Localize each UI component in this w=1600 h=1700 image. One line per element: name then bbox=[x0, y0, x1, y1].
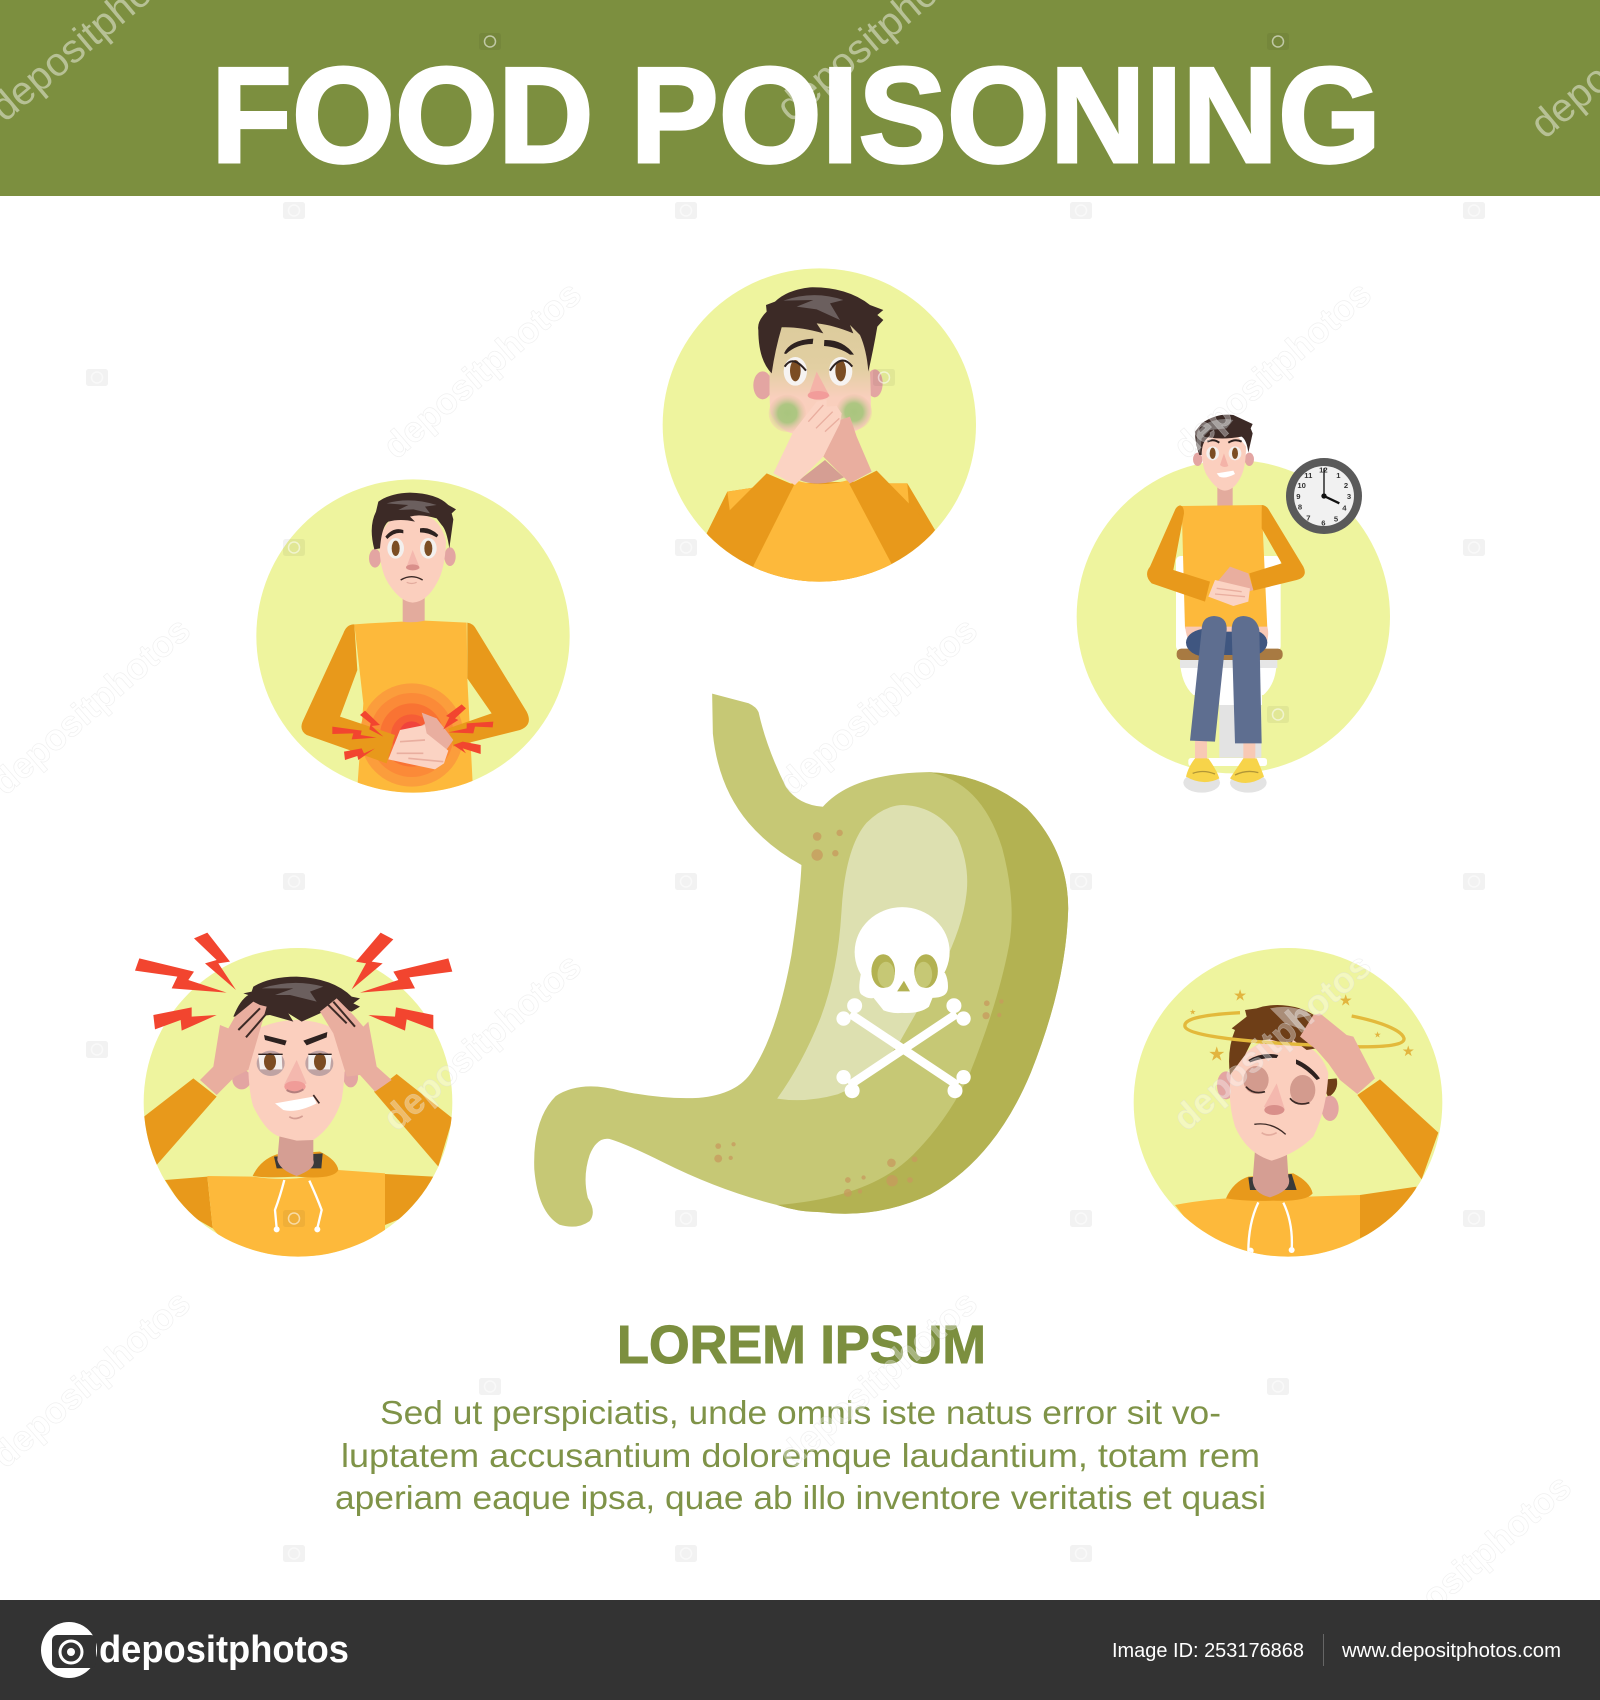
icon: wall clock at four o'clock: 4 bbox=[1342, 503, 1347, 512]
toilet bbox=[1176, 556, 1283, 766]
title: FOOD POISONING bbox=[211, 39, 1381, 191]
icon: wall clock at four o'clock: 8 bbox=[1298, 503, 1303, 512]
person seated bbox=[1147, 415, 1305, 793]
dizzy halo and stars: ★ bbox=[1374, 1030, 1382, 1040]
icon: wall clock at four o'clock: 6 bbox=[1321, 519, 1325, 528]
hood and neck bbox=[1226, 1150, 1313, 1254]
icon: wall clock at four o'clock: 5 bbox=[1334, 514, 1339, 523]
footer bar bbox=[0, 1600, 1600, 1700]
icon: wall clock at four o'clock: 1 bbox=[1336, 471, 1341, 480]
pain rings bbox=[360, 683, 463, 787]
pain bolts bbox=[135, 933, 452, 1031]
watermark: repeated stock-photo marks: depositphotos bbox=[771, 1282, 985, 1475]
icon: wall clock at four o'clock: 3 bbox=[1347, 492, 1351, 501]
image id: Image ID: 253176868 bbox=[1112, 1640, 1304, 1662]
icon: skull and crossbones bbox=[836, 907, 971, 1098]
panel: stomach pain, left circle bbox=[256, 479, 570, 797]
icon: wall clock at four o'clock: 10 bbox=[1297, 481, 1306, 490]
body text block bbox=[335, 1394, 1266, 1516]
icon: wall clock at four o'clock: 7 bbox=[1306, 513, 1310, 522]
dizzy halo and stars: ★ bbox=[1208, 1045, 1225, 1066]
icon: camera logo bbox=[41, 1622, 97, 1678]
panel: diarrhea, right circle with clock bbox=[1077, 415, 1390, 793]
hand on forehead bbox=[1300, 1013, 1375, 1094]
head bbox=[369, 493, 456, 603]
footer brand: depositphotos bbox=[99, 1629, 349, 1671]
dizzy halo and stars: ★ bbox=[1339, 992, 1353, 1009]
dizzy halo and stars: ★ bbox=[1233, 988, 1247, 1005]
hair bbox=[1229, 1005, 1332, 1075]
icon: wall clock at four o'clock bbox=[1286, 458, 1362, 534]
icon: wall clock at four o'clock: 11 bbox=[1304, 471, 1313, 480]
head bbox=[753, 287, 883, 434]
watermark: repeated stock-photo marks: depositphotos bbox=[1165, 273, 1379, 466]
watermark: repeated stock-photo marks: depositphotos bbox=[375, 945, 589, 1138]
icon: wall clock at four o'clock: 12 bbox=[1319, 465, 1328, 474]
watermark: repeated stock-photo marks: depositphotos bbox=[771, 609, 985, 802]
heading: lorem ipsum: LOREM IPSUM bbox=[617, 1315, 986, 1375]
footer url: www.depositphotos.com bbox=[1341, 1640, 1561, 1662]
body text block: luptatem accusantium doloremque laudantium, totam rem bbox=[341, 1437, 1260, 1474]
pain bolts bbox=[332, 704, 493, 760]
dizzy halo and stars: ★ bbox=[1189, 1008, 1196, 1017]
hands on belly bbox=[388, 713, 453, 769]
body text block: Sed ut perspiciatis, unde omnis iste natus error sit vo- bbox=[380, 1394, 1221, 1431]
stomach inner highlight bbox=[777, 805, 967, 1100]
icon: wall clock at four o'clock: 2 bbox=[1344, 481, 1348, 490]
panel: headache, bottom-left circle bbox=[135, 933, 453, 1260]
head bbox=[1217, 1005, 1339, 1161]
spots bbox=[714, 830, 1004, 1197]
hands over mouth bbox=[773, 399, 872, 485]
hands on head bbox=[200, 998, 392, 1095]
icon: wall clock at four o'clock: 9 bbox=[1296, 492, 1300, 501]
hair bbox=[233, 977, 360, 1022]
watermark: repeated stock-photo marks: depositphotos bbox=[1165, 945, 1379, 1138]
body text block: aperiam eaque ipsa, quae ab illo inventore veritatis et quasi bbox=[335, 1479, 1266, 1516]
header banner bbox=[0, 0, 1600, 196]
face bbox=[232, 1020, 358, 1141]
watermark: repeated stock-photo marks: depositphotos bbox=[375, 273, 589, 466]
dizzy halo and stars bbox=[1185, 988, 1415, 1066]
watermark: repeated stock-photo marks: depositphotos bbox=[1365, 1466, 1579, 1659]
panel: nausea, top circle bbox=[663, 268, 976, 590]
dizzy halo and stars: ★ bbox=[1402, 1044, 1415, 1060]
hood and neck bbox=[253, 1130, 338, 1232]
panel: dizziness, bottom-right circle bbox=[1134, 948, 1442, 1267]
stomach with skull and crossbones bbox=[534, 694, 1068, 1227]
